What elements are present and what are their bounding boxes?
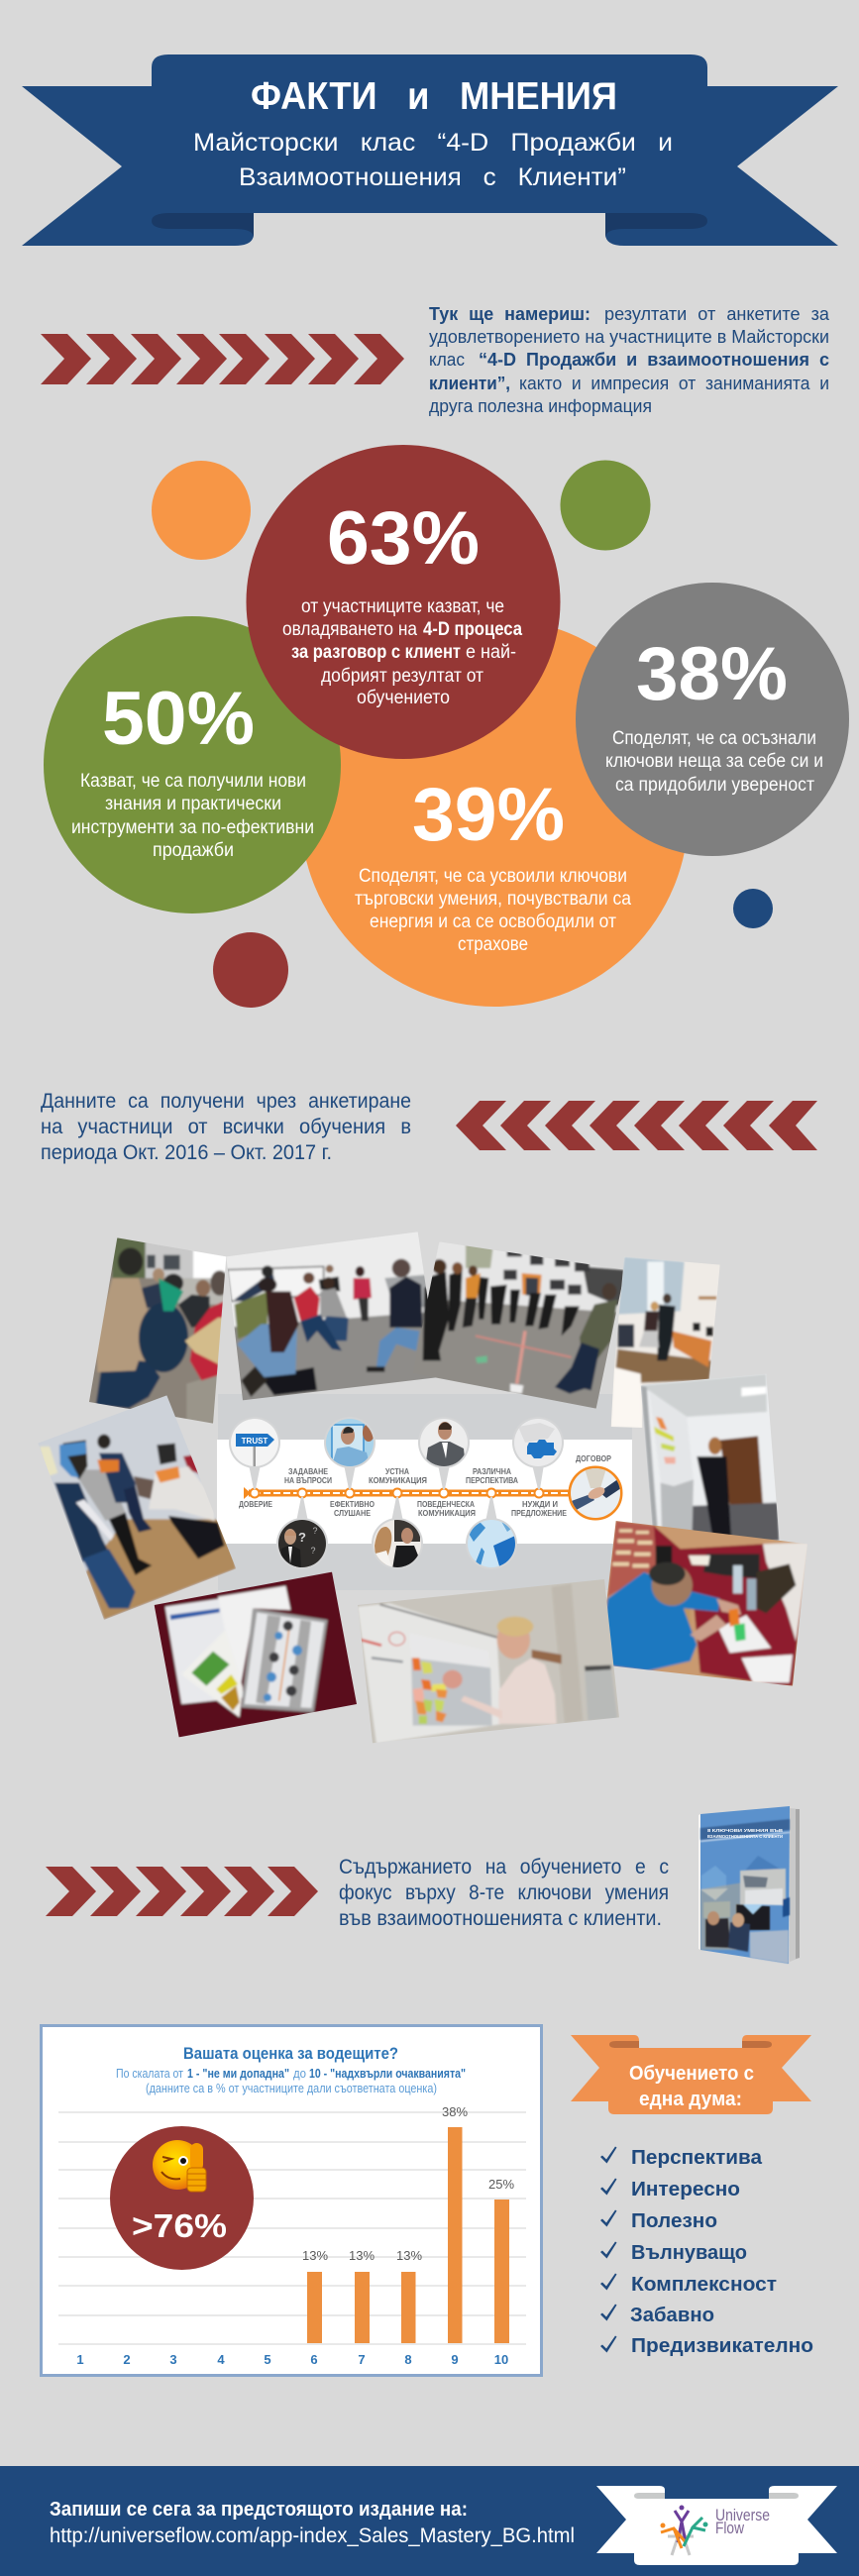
content text: Съдържанието на обучението е с [339,1856,669,1878]
stat bubble: 50%: 50% [102,677,255,761]
stat bubble: 63%: 63% [327,496,480,581]
arrow: chevrons right 2 [46,1867,318,1916]
orange ribbon [571,2035,811,2114]
chart subtitle: (данните са в % от участниците дали съответната оценка) [146,2081,437,2095]
icon: workbook cover [698,1806,800,1964]
timeline labels [239,1453,611,1518]
stat bubble: 63%: обучението [357,688,450,708]
icon: question marks: ? [310,1546,316,1556]
intro text: Тук ще намериш: [429,304,591,324]
stat bubble: 38% [576,583,849,856]
subtitle [193,129,673,191]
bar chart [307,2127,509,2343]
value labels: 13% [349,2248,375,2263]
intro text: удовлетворението на участниците в Майсторски [429,327,829,347]
icon: question marks: ? [312,1526,318,1536]
timeline labels: НА ВЪПРОСИ [284,1475,332,1485]
stat bubble: 50% [44,616,341,913]
stat bubble: 63%: за разговор с клиент [291,642,461,663]
stat bubble: 38%: 38% [636,632,788,716]
method text: периода Окт. 2016 – Окт. 2017 г. [41,1141,332,1164]
axis labels: 2 [123,2352,131,2367]
stat bubble: 63%: 4-D процеса [423,619,522,640]
stat bubble: 39%: 39% [412,773,565,857]
callout: 76%: >76% [132,2207,227,2244]
method text [41,1090,411,1164]
checklist: Перспектива [631,2147,763,2169]
intro text: клас [429,350,465,370]
footer call to action: Запиши се сега за предстоящото издание на: [50,2499,468,2521]
method text: на участници от всички обучения в [41,1116,411,1138]
content text: във взаимоотношенията с клиенти. [339,1907,662,1930]
title: ФАКТИ и МНЕНИЯ [251,75,617,118]
chart subtitle: до [293,2066,306,2081]
timeline labels: ПЕРСПЕКТИВА [466,1475,518,1485]
ribbon text: Обучението с [629,2063,754,2085]
stat bubble: 63% [246,445,561,759]
axis labels: 9 [451,2352,459,2367]
header ribbon [22,54,838,246]
photo: woman at flipchart [640,1374,779,1541]
intro text [429,304,830,416]
panel: rating chart [42,2025,541,2376]
logo [660,2505,770,2555]
icon: two women [374,1520,421,1567]
icon: puzzle [514,1419,562,1466]
photo: trainers in room [607,1255,723,1430]
intro text: друга полезна информация [429,396,652,416]
stat bubble: 63%: от участниците казват, че [301,596,504,617]
axis labels: 3 [169,2352,177,2367]
timeline labels: ПРЕДЛОЖЕНИЕ [511,1508,567,1518]
timeline labels: УСТНА [385,1466,409,1476]
icon: thumbs up smiley [153,2140,206,2192]
icon: trust sign [231,1419,278,1466]
photo: man working at table [597,1519,809,1687]
stat bubble: 38%: ключови неща за себе си и [605,751,823,772]
footer [0,2466,859,2576]
decorative dot: red [213,932,288,1008]
value labels [302,2104,514,2263]
icon: trust sign: TRUST [242,1437,268,1446]
timeline labels: ЕФЕКТИВНО [330,1499,375,1509]
axis labels: 6 [310,2352,318,2367]
panel: 4-D process timeline [217,1394,632,1590]
stat bubble: 50%: продажби [153,840,234,861]
checklist: Полезно [631,2210,717,2232]
footer ribbon with logo [596,2486,837,2565]
decorative dot: blue [733,889,773,928]
icon: question marks [278,1520,326,1567]
intro text: резултати от анкетите за [604,304,830,324]
value labels: 38% [442,2104,468,2119]
timeline pins [229,1417,564,1569]
ribbon text: една дума: [639,2089,742,2110]
decorative dot: orange [152,461,251,560]
checklist: Интересно [631,2179,740,2200]
icon: workbook cover: ВЗАИМООТНОШЕНИЯТА С КЛИЕНТИ [707,1834,783,1839]
axis labels: 4 [217,2352,225,2367]
decorative dot: green [561,460,650,551]
chart subtitle: 1 - "не ми допадна" [187,2066,289,2081]
value labels: 13% [396,2248,422,2263]
timeline labels: КОМУНИКАЦИЯ [418,1508,476,1518]
stat bubble: 50%: знания и практически [105,794,281,814]
intro text: както и импресия от заниманията и [519,374,829,393]
value labels: 25% [488,2177,514,2192]
photo: handouts on burgundy table [152,1568,360,1741]
icon: man with frame [326,1419,374,1466]
timeline labels: НУЖДИ И [522,1499,558,1509]
stat bubble: 50%: Казват, че са получили нови [80,771,306,792]
logo: Universe [715,2506,770,2524]
intro text: клиенти”, [429,374,510,393]
callout: 76% [110,2126,254,2270]
content text: фокус върху 8-те ключови умения [339,1881,669,1904]
timeline labels: ДОВЕРИЕ [239,1499,272,1509]
stat bubble: 39%: търговски умения, почувствали са [355,889,631,910]
stat bubble: 39%: страхове [458,934,528,955]
checklist: Вълнуващо [631,2242,747,2264]
photo: man at whiteboard [355,1575,622,1747]
subtitle: Майсторски клас “4-D Продажби и [193,129,673,157]
photo: team outdoors with blindfold [89,1238,226,1423]
timeline labels: СЛУШАНЕ [334,1508,371,1518]
icon: handshake [569,1467,624,1519]
arrow: chevrons left [456,1101,817,1150]
stat bubble: 39%: Споделят, че са усвоили ключови [359,866,627,887]
value labels: 13% [302,2248,328,2263]
footer call to action [50,2499,575,2547]
footer call to action: http://universeflow.com/app-index_Sales_Mastery_BG.html [50,2524,575,2547]
chart subtitle [116,2066,466,2095]
timeline labels: ПОВЕДЕНЧЕСКА [417,1499,475,1509]
axis labels: 5 [264,2352,271,2367]
ribbon text [629,2063,754,2110]
timeline labels: ЗАДАВАНЕ [288,1466,328,1476]
checklist: Забавно [630,2305,714,2326]
logo: Flow [715,2519,745,2537]
icon: businessman [420,1419,468,1466]
checklist: Комплексност [631,2274,777,2296]
chart subtitle: 10 - "надхвърли очакванията" [309,2066,466,2081]
stat bubble: 38%: са придобили увереност [615,775,814,796]
chart subtitle: По скалата от [116,2066,183,2081]
timeline line [244,1487,571,1499]
stat bubble: 39% [300,618,689,1007]
stat bubble: 50%: инструменти за по-ефективни [71,817,314,838]
stat bubble: 63%: добрият резултат от [321,666,483,687]
icon: blue buildings [468,1520,515,1567]
axis labels: 7 [358,2352,366,2367]
icon: question marks: ? [298,1530,306,1545]
intro text: “4-D Продажби и взаимоотношения с [479,350,829,370]
axis labels: 10 [494,2352,508,2367]
chart title: Вашата оценка за водещите? [183,2045,398,2063]
stat bubble: 38%: Споделят, че са осъзнали [612,728,816,749]
arrow: chevrons right 1 [41,334,404,384]
axis labels: 1 [76,2352,84,2367]
method text: Данните са получени чрез анкетиране [41,1090,411,1113]
photo: circle of people in courtyard [422,1242,623,1409]
photo: blindfold exercise [37,1394,238,1622]
photo: group exercise indoors [225,1229,443,1404]
subtitle: Взаимоотношения с Клиенти” [239,163,626,191]
timeline labels: РАЗЛИЧНА [473,1466,511,1476]
stat bubble: 63%: е най- [466,642,516,663]
timeline labels: КОМУНИКАЦИЯ [369,1475,427,1485]
checklist [600,2146,813,2357]
content text [339,1856,669,1930]
stat bubble: 63%: овладяването на [282,619,417,640]
timeline labels: ДОГОВОР [576,1453,611,1463]
axis labels: 8 [404,2352,412,2367]
stat bubble: 39%: енергия и са се освободили от [370,912,616,932]
axis labels [76,2352,508,2367]
checklist: Предизвикателно [631,2335,813,2357]
icon: workbook cover: 8 КЛЮЧОВИ УМЕНИЯ ВЪВ [707,1828,784,1833]
